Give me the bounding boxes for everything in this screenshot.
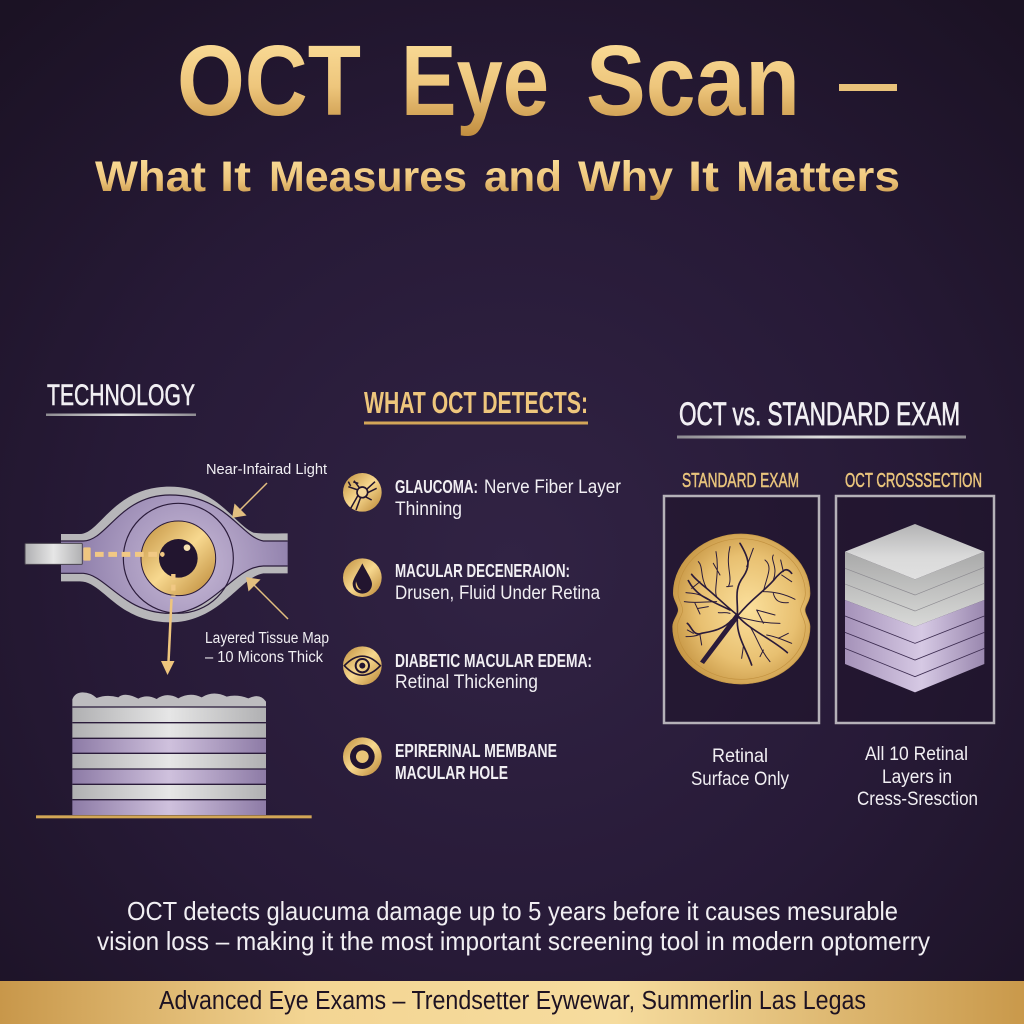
item: epiretinal membrane and macular hole bbox=[395, 740, 557, 783]
title: OCT bbox=[177, 25, 361, 137]
caption: retinal surface only: Surface Only bbox=[691, 769, 789, 790]
title: What bbox=[95, 153, 206, 201]
item: macular degeneration: Drusen, Fluid Under Retina bbox=[395, 583, 600, 604]
heading: technology: TECHNOLOGY bbox=[47, 379, 195, 412]
label: layered tissue map bbox=[205, 630, 329, 666]
item: glaucoma bbox=[395, 476, 622, 520]
item: glaucoma: Thinning bbox=[395, 499, 462, 520]
title: It bbox=[220, 153, 251, 201]
title: Eye bbox=[401, 25, 549, 137]
callout: key statement: OCT detects glaucuma damage up to 5 years before it causes mesurable bbox=[127, 896, 898, 926]
callout: key statement: vision loss – making it the most important screening tool in modern optomerry bbox=[97, 926, 930, 956]
heading: what OCT detects: WHAT OCT DETECTS: bbox=[364, 385, 588, 420]
caption: retinal surface only bbox=[691, 746, 789, 790]
title: Measures bbox=[269, 153, 467, 201]
arrow: scan down to tissue map bbox=[161, 599, 174, 675]
footer band bbox=[0, 981, 1024, 1024]
item: diabetic macular edema bbox=[395, 650, 592, 693]
item: epiretinal membrane and macular hole: MACULAR HOLE bbox=[395, 762, 508, 783]
heading: what OCT detects bbox=[364, 385, 588, 424]
illustration: layered retina block bbox=[845, 524, 984, 692]
title: Scan bbox=[586, 25, 800, 137]
title: and bbox=[484, 153, 562, 201]
column label: standard exam: STANDARD EXAM bbox=[682, 470, 799, 492]
caption: all 10 retinal layers: All 10 Retinal bbox=[865, 744, 968, 765]
label: near-infrared light: Near-Infairad Light bbox=[206, 461, 328, 478]
item: glaucoma: GLAUCOMA: bbox=[395, 476, 478, 497]
panel: technology bbox=[25, 379, 329, 818]
item: macular degeneration bbox=[395, 560, 600, 604]
label: layered tissue map: – 10 Micons Thick bbox=[205, 649, 323, 666]
title: Matters bbox=[736, 153, 900, 201]
panel: OCT vs standard exam bbox=[664, 396, 994, 810]
arrow: near-infrared pointer bbox=[233, 483, 267, 517]
icon: eye bbox=[343, 646, 382, 685]
caption: all 10 retinal layers bbox=[857, 744, 978, 810]
icon: nerve fibers bbox=[343, 473, 382, 512]
caption: all 10 retinal layers: Layers in bbox=[882, 767, 952, 788]
footer band: Advanced Eye Exams – Trendsetter Eywewar, Summerlin Las Legas bbox=[159, 987, 866, 1015]
caption: retinal surface only: Retinal bbox=[712, 746, 768, 767]
title bbox=[95, 25, 900, 201]
label: layered tissue map: Layered Tissue Map bbox=[205, 630, 329, 647]
icon: fluid drop bbox=[343, 558, 382, 597]
item: glaucoma: Nerve Fiber Layer bbox=[484, 477, 622, 498]
title: It bbox=[688, 153, 719, 201]
caption: all 10 retinal layers: Cress-Sresction bbox=[857, 789, 978, 810]
diagram: retinal layer stack bbox=[36, 692, 312, 818]
callout: key statement bbox=[97, 896, 930, 956]
item: macular degeneration: MACULAR DECENERAION: bbox=[395, 560, 570, 581]
frame: OCT cross section bbox=[836, 496, 994, 723]
arrow: tissue map pointer bbox=[247, 578, 288, 619]
diagram: eye cross-section bbox=[25, 487, 288, 622]
icon: macular hole bbox=[343, 737, 382, 776]
item: epiretinal membrane and macular hole: EPIRERINAL MEMBANE bbox=[395, 740, 557, 761]
item: diabetic macular edema: Retinal Thickening bbox=[395, 672, 538, 693]
frame: standard exam bbox=[664, 496, 819, 723]
item: diabetic macular edema: DIABETIC MACULAR EDEMA: bbox=[395, 650, 592, 671]
title: Why bbox=[578, 153, 673, 201]
panel: what OCT detects bbox=[343, 385, 622, 783]
illustration: retinal fundus bbox=[673, 534, 810, 684]
